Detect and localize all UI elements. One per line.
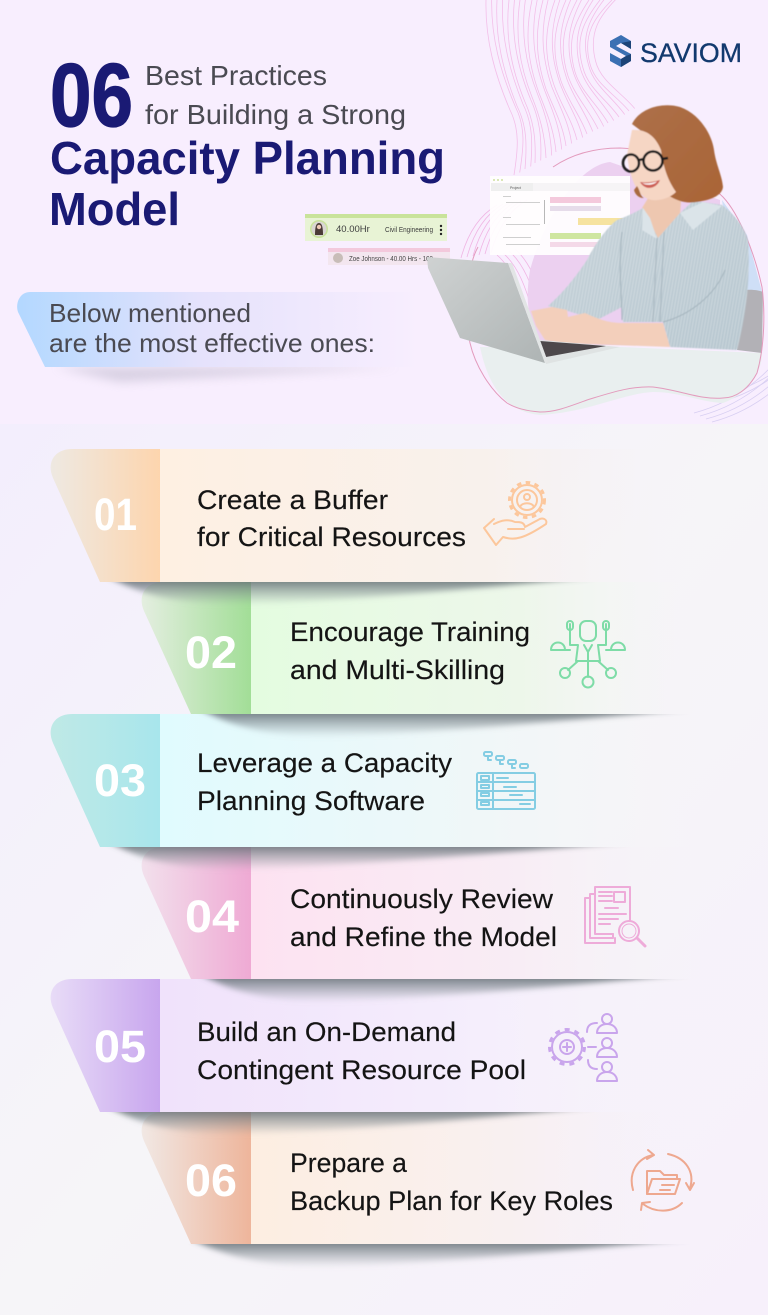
- step 4 text: Continuously Review: [290, 884, 554, 914]
- collar: [642, 202, 722, 239]
- step 2 text: Encourage Training: [290, 617, 530, 647]
- step 4 number: 04: [185, 891, 239, 942]
- gantt card: [490, 176, 630, 255]
- decorative wave lines: [461, 0, 768, 422]
- icon: gantt table: [477, 752, 535, 809]
- intro banner: are the most effective ones:: [49, 328, 375, 358]
- laptop lid: [427, 257, 545, 363]
- subtitle line one: Best Practices: [145, 60, 327, 91]
- banner text: Below mentioned: [49, 298, 251, 328]
- step 4 text: [290, 884, 557, 952]
- icon: logo mark: [610, 35, 631, 67]
- step 1 text: Create a Buffer: [197, 485, 388, 515]
- sofa: [737, 290, 763, 353]
- green resource card: 40.00Hr: [336, 224, 370, 235]
- step 5 text: Build an On-Demand: [197, 1017, 456, 1047]
- step 2 body: [251, 582, 700, 714]
- step 4 tab: [142, 847, 251, 979]
- step 1 number: 01: [94, 489, 137, 540]
- shirt placket: [653, 232, 664, 322]
- step 5 text: [197, 1017, 526, 1085]
- step 3 number: 03: [94, 755, 146, 806]
- row shadows: [108, 576, 690, 1266]
- laptop: [427, 257, 620, 364]
- step 4 text: and Refine the Model: [290, 922, 557, 952]
- heading line two: Model: [49, 183, 180, 235]
- step 3 tab: [51, 714, 160, 847]
- step 3 text: [197, 748, 453, 816]
- step 3 text: Leverage a Capacity: [197, 748, 453, 778]
- step 5 number: 05: [94, 1021, 146, 1072]
- neck: [642, 188, 682, 240]
- step 6 tab: [142, 1112, 251, 1244]
- step 4 body: [251, 847, 700, 979]
- step 6 text: Prepare a: [290, 1148, 408, 1178]
- step 4 panel: [142, 847, 700, 979]
- step 5 body: [160, 979, 700, 1112]
- icon: documents and magnifier: [585, 887, 645, 946]
- step 1 text: [197, 485, 466, 552]
- step 5 panel: [51, 979, 700, 1112]
- blob outline: [467, 148, 764, 412]
- lilac blob: [528, 162, 720, 345]
- pink resource card: [328, 248, 450, 265]
- mouth: [640, 180, 660, 188]
- big number 06: 06: [50, 46, 133, 146]
- step 1 panel: [51, 449, 700, 582]
- step 3 body: [160, 714, 700, 847]
- step 2 text: [290, 617, 530, 685]
- face: [627, 130, 676, 200]
- sleeve fold: [620, 232, 725, 322]
- step 6 number: 06: [185, 1155, 237, 1206]
- person: [531, 105, 749, 350]
- step 1 body: [160, 449, 700, 582]
- step 2 number: 02: [185, 627, 237, 678]
- step 5 text: Contingent Resource Pool: [197, 1055, 526, 1085]
- heading line one: Capacity Planning: [50, 132, 445, 184]
- step 6 text: Backup Plan for Key Roles: [290, 1186, 613, 1216]
- title: [49, 46, 445, 235]
- subtitle line two: for Building a Strong: [145, 99, 406, 130]
- step 3 panel: [51, 714, 700, 847]
- hair: [632, 105, 723, 203]
- step 6 body: [251, 1112, 700, 1244]
- banner shadow: [55, 367, 400, 382]
- hair lock: [634, 186, 644, 198]
- green resource card: [305, 214, 447, 241]
- icon: folder with cycle arrows: [632, 1150, 694, 1211]
- step 5 tab: [51, 979, 160, 1112]
- step 2 panel: [142, 582, 700, 714]
- right pale blue area: [722, 200, 762, 292]
- icon: multi-skilled person: [551, 621, 625, 688]
- logo: Saviom: [610, 35, 742, 68]
- glasses: [623, 152, 668, 172]
- banner shape: [17, 292, 420, 367]
- gantt card: Project: [510, 186, 521, 190]
- icon: gear and hand: [484, 482, 546, 545]
- shirt: [548, 202, 749, 350]
- step 2 tab: [142, 582, 251, 714]
- white table: [480, 347, 762, 415]
- green resource card: Civil Engineering: [385, 225, 433, 234]
- intro banner: [17, 292, 420, 382]
- step 6 text: [290, 1148, 613, 1216]
- step 6 panel: [142, 1112, 700, 1244]
- keyboard: [540, 341, 606, 357]
- icon: gear and people: [550, 1014, 617, 1081]
- arms and hands: [531, 307, 670, 347]
- step 2 text: and Multi-Skilling: [290, 655, 505, 685]
- pink resource card: Zoe Johnson - 40.00 Hrs - 100: [349, 254, 433, 263]
- step 3 text: Planning Software: [197, 786, 425, 816]
- step 1 tab: [51, 449, 160, 582]
- step 1 text: for Critical Resources: [197, 522, 466, 552]
- laptop base: [540, 340, 620, 364]
- logo: Saviom: SAVIOM: [640, 38, 742, 68]
